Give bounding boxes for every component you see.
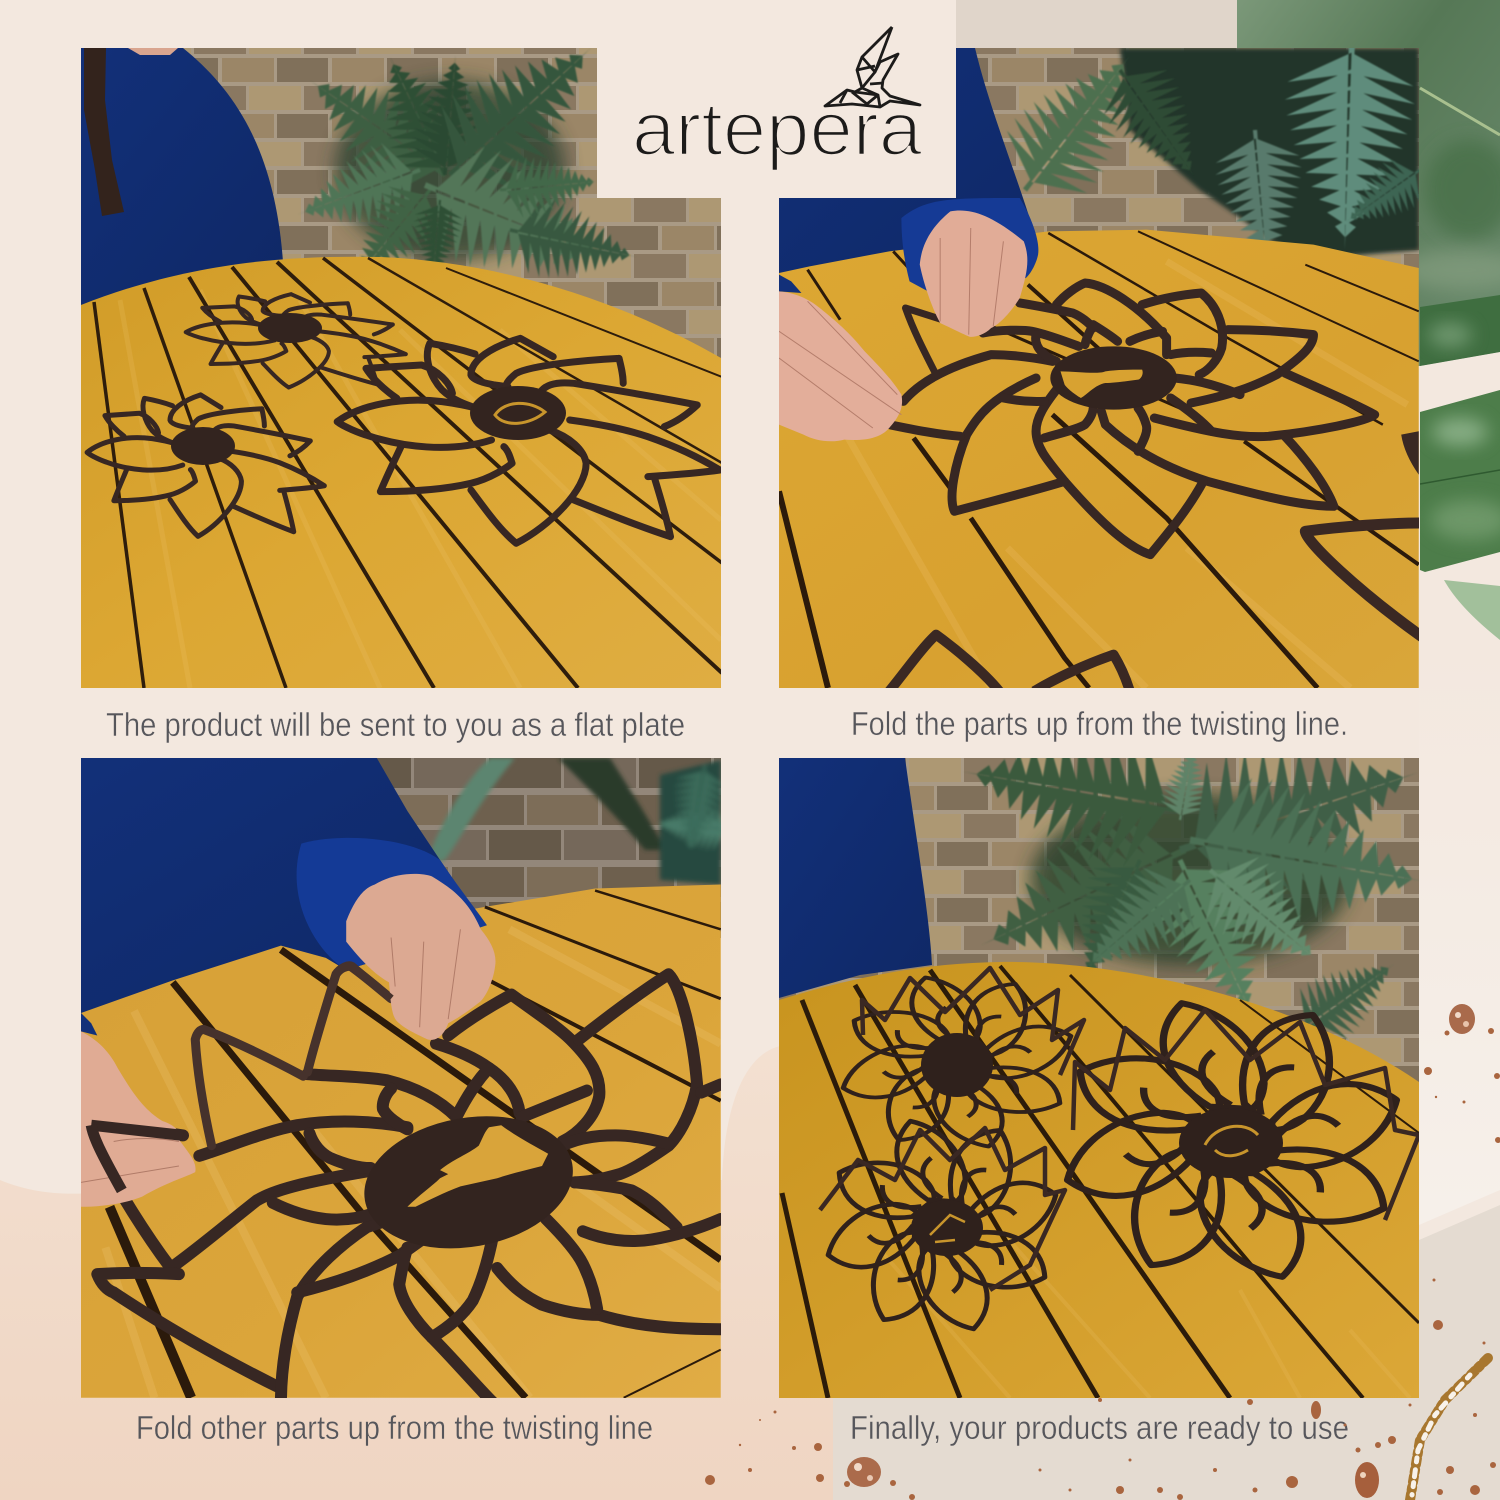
- blue sweater: [81, 48, 283, 305]
- plank gaps: [110, 891, 721, 1398]
- caption: step 4: Finally, your products are ready to use: [850, 1409, 1349, 1446]
- logo panel: [597, 0, 956, 198]
- rose-gold glitter: [705, 1004, 1500, 1500]
- wood grain: [848, 261, 1407, 688]
- raised petal tips: [820, 968, 1419, 1290]
- panel: step 1 photo: [81, 4, 722, 688]
- hand: left: [81, 1031, 196, 1207]
- small sleeve: [81, 1013, 97, 1035]
- icon: origami bird: [825, 27, 920, 107]
- hand: top: [336, 874, 496, 1040]
- blue sweater: [779, 48, 1035, 290]
- photo contents traced at panel scale: [779, 198, 1424, 691]
- plank gaps: [782, 966, 1419, 1398]
- skin at top: [128, 48, 178, 55]
- flower plate: [889, 283, 1375, 555]
- caption: step 2: Fold the parts up from the twisting line.: [851, 705, 1348, 742]
- tropical leaf: top right: [1237, 0, 1500, 640]
- photo contents traced at panel scale: [81, 758, 721, 1403]
- caption: step 3: Fold other parts up from the twisting line: [136, 1409, 653, 1446]
- flower plate: [90, 966, 721, 1403]
- blue sweater: [81, 758, 485, 1013]
- ferns: [1007, 48, 1419, 244]
- plank gaps: [779, 231, 1419, 688]
- partial flower pieces: [889, 523, 1424, 691]
- folded flowers: [818, 971, 1409, 1338]
- panel: step 2 photo: [779, 24, 1436, 691]
- flat flower plates: [87, 294, 720, 543]
- wordmark: artepera: [632, 87, 923, 172]
- brick wall: [376, 758, 721, 938]
- panel: step 3 photo: [81, 758, 732, 1403]
- sweater cuff: [901, 198, 1038, 295]
- brick wall: [975, 48, 1419, 268]
- fern: [304, 50, 634, 278]
- brick wall: [779, 758, 1419, 1088]
- disc with map cutout: [1050, 346, 1177, 410]
- brick wall: [81, 48, 721, 368]
- round table: [779, 230, 1419, 688]
- wood grain: [120, 290, 721, 688]
- fern: [951, 699, 1442, 1059]
- caption: step 1: The product will be sent to you as a flat plate: [106, 706, 685, 743]
- wood grain: [880, 1230, 1410, 1398]
- disc with map cutout: [364, 1116, 573, 1248]
- braid: [84, 48, 124, 216]
- round table: [81, 257, 721, 688]
- wood grain: [105, 929, 721, 1398]
- small sleeve: [779, 275, 801, 293]
- panel: step 4 photo: [779, 699, 1442, 1398]
- sweater cuff: [297, 838, 487, 970]
- round table: [81, 884, 721, 1398]
- round table: [779, 962, 1419, 1398]
- hand: left: [779, 291, 902, 441]
- hand: top: [920, 211, 1027, 337]
- blue sweater: [779, 758, 932, 998]
- blurred fern: [425, 758, 732, 885]
- dark foliage: [1120, 48, 1419, 260]
- plank gaps: [94, 258, 722, 688]
